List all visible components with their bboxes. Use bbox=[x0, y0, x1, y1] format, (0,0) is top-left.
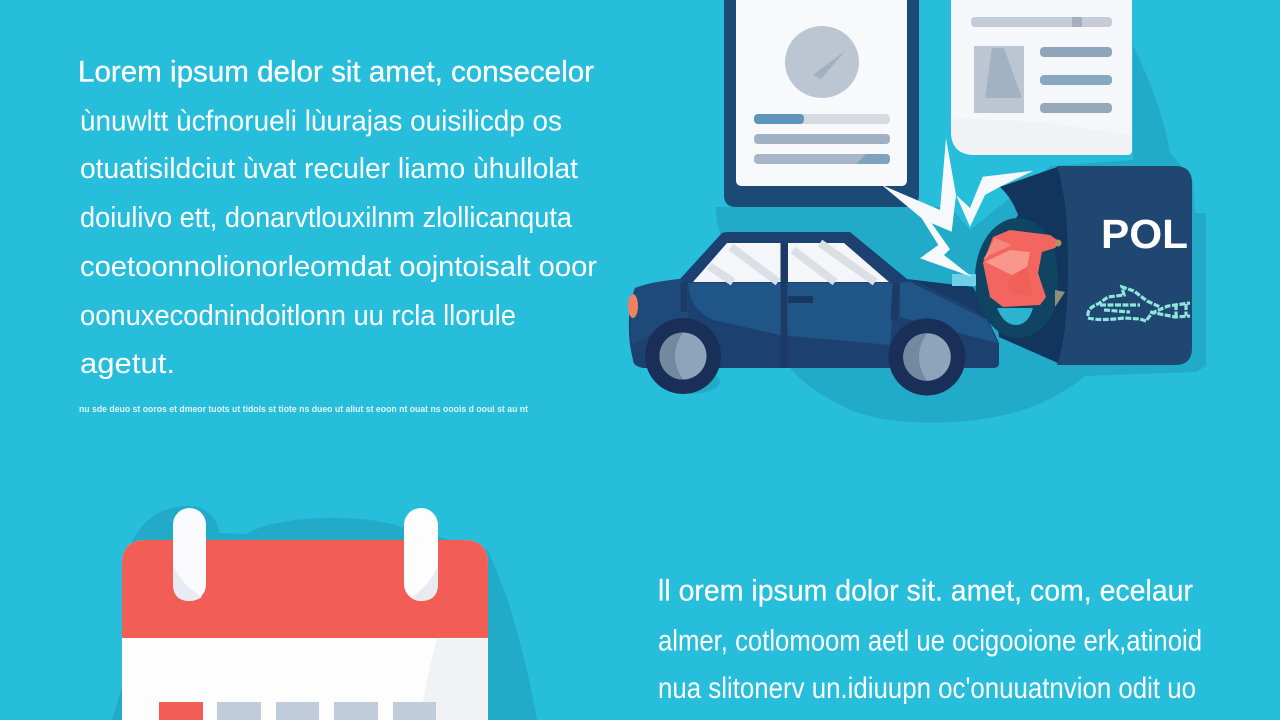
text block: upper left paragraph: doiulivo ett, donarvtlouxilnm zlollicanquta bbox=[80, 202, 573, 234]
window: front bbox=[788, 243, 889, 282]
text block: upper left paragraph: agetut. bbox=[80, 348, 175, 380]
text block: lower right paragraph: nua slitonerv un.idiuupn oc'onuuatnvion odit uo bbox=[658, 672, 1196, 705]
text block: upper left paragraph bbox=[78, 56, 597, 414]
document: right ID sheet bbox=[951, 0, 1132, 155]
window: rear bbox=[693, 243, 782, 282]
icon: white crash lightning burst bbox=[882, 138, 1033, 277]
wheel: rear bbox=[645, 318, 721, 394]
illustration: police report and car crash bbox=[628, 0, 1206, 423]
icon: dotted car on booth bbox=[1088, 287, 1190, 321]
text block: upper left paragraph: nu sde deuo st ooros et dmeor tuots ut tidols st tiote ns dueo ut aliut st eoon nt ouat ns ooois d ooui st au nt bbox=[79, 404, 528, 414]
text block: lower right paragraph: ll orem ipsum dolor sit. amet, com, ecelaur bbox=[658, 574, 1193, 608]
text block: upper left paragraph: otuatisildciut ùvat reculer liamo ùhullolat bbox=[80, 153, 578, 185]
day squares bbox=[159, 702, 436, 720]
text block: upper left paragraph: ùnuwltt ùcfnorueli lùurajas ouisilicdp os bbox=[80, 106, 562, 138]
police booth bbox=[975, 166, 1192, 365]
ring: right bbox=[404, 508, 438, 601]
text block: lower right paragraph: almer, cotlomoom aetl ue ocigooione erk,atinoid bbox=[658, 624, 1202, 658]
wheel: front bbox=[888, 318, 966, 396]
text block: lower right paragraph bbox=[658, 574, 1202, 705]
ring: left bbox=[173, 508, 206, 601]
teal lower opening bbox=[997, 308, 1033, 325]
icon: olive tab bbox=[1055, 290, 1065, 307]
calendar icon bbox=[112, 506, 537, 720]
text block: upper left paragraph: Lorem ipsum delor sit amet, consecelor bbox=[78, 56, 594, 88]
car bbox=[628, 232, 999, 396]
text block: upper left paragraph: coetoonnolionorleomdat oojntoisalt ooor bbox=[80, 251, 597, 283]
label: POL: POL bbox=[1101, 211, 1188, 257]
tail light bbox=[628, 294, 638, 318]
light blue glow at crash point bbox=[952, 274, 976, 286]
document: left report sheet bbox=[724, 0, 919, 207]
text block: upper left paragraph: oonuxecodnindoitlonn uu rcla llorule bbox=[80, 300, 516, 332]
figure: red airbag shape bbox=[983, 230, 1065, 325]
shadow: under rear wheel bbox=[660, 370, 720, 394]
